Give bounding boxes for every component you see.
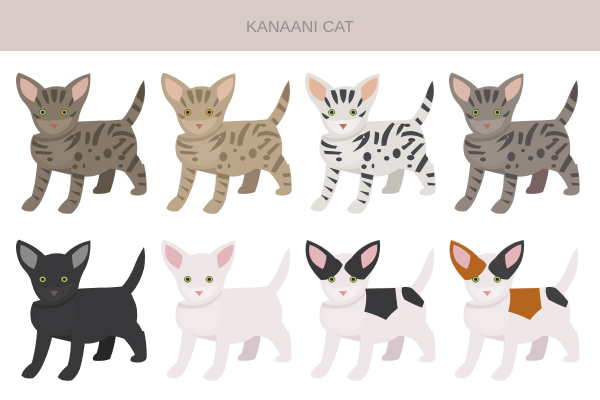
cat: calico xyxy=(449,240,580,381)
cat: white with black patches xyxy=(305,240,436,381)
cat: golden spotted tabby xyxy=(161,73,292,214)
cat: grey-brown spotted tabby xyxy=(449,73,580,214)
title: KANAANI CAT xyxy=(246,19,354,36)
cat: solid black xyxy=(16,240,147,381)
title banner xyxy=(0,0,600,51)
cat: brown spotted tabby xyxy=(16,73,147,214)
cat: solid white xyxy=(161,240,292,381)
cat: silver spotted tabby xyxy=(305,73,436,214)
